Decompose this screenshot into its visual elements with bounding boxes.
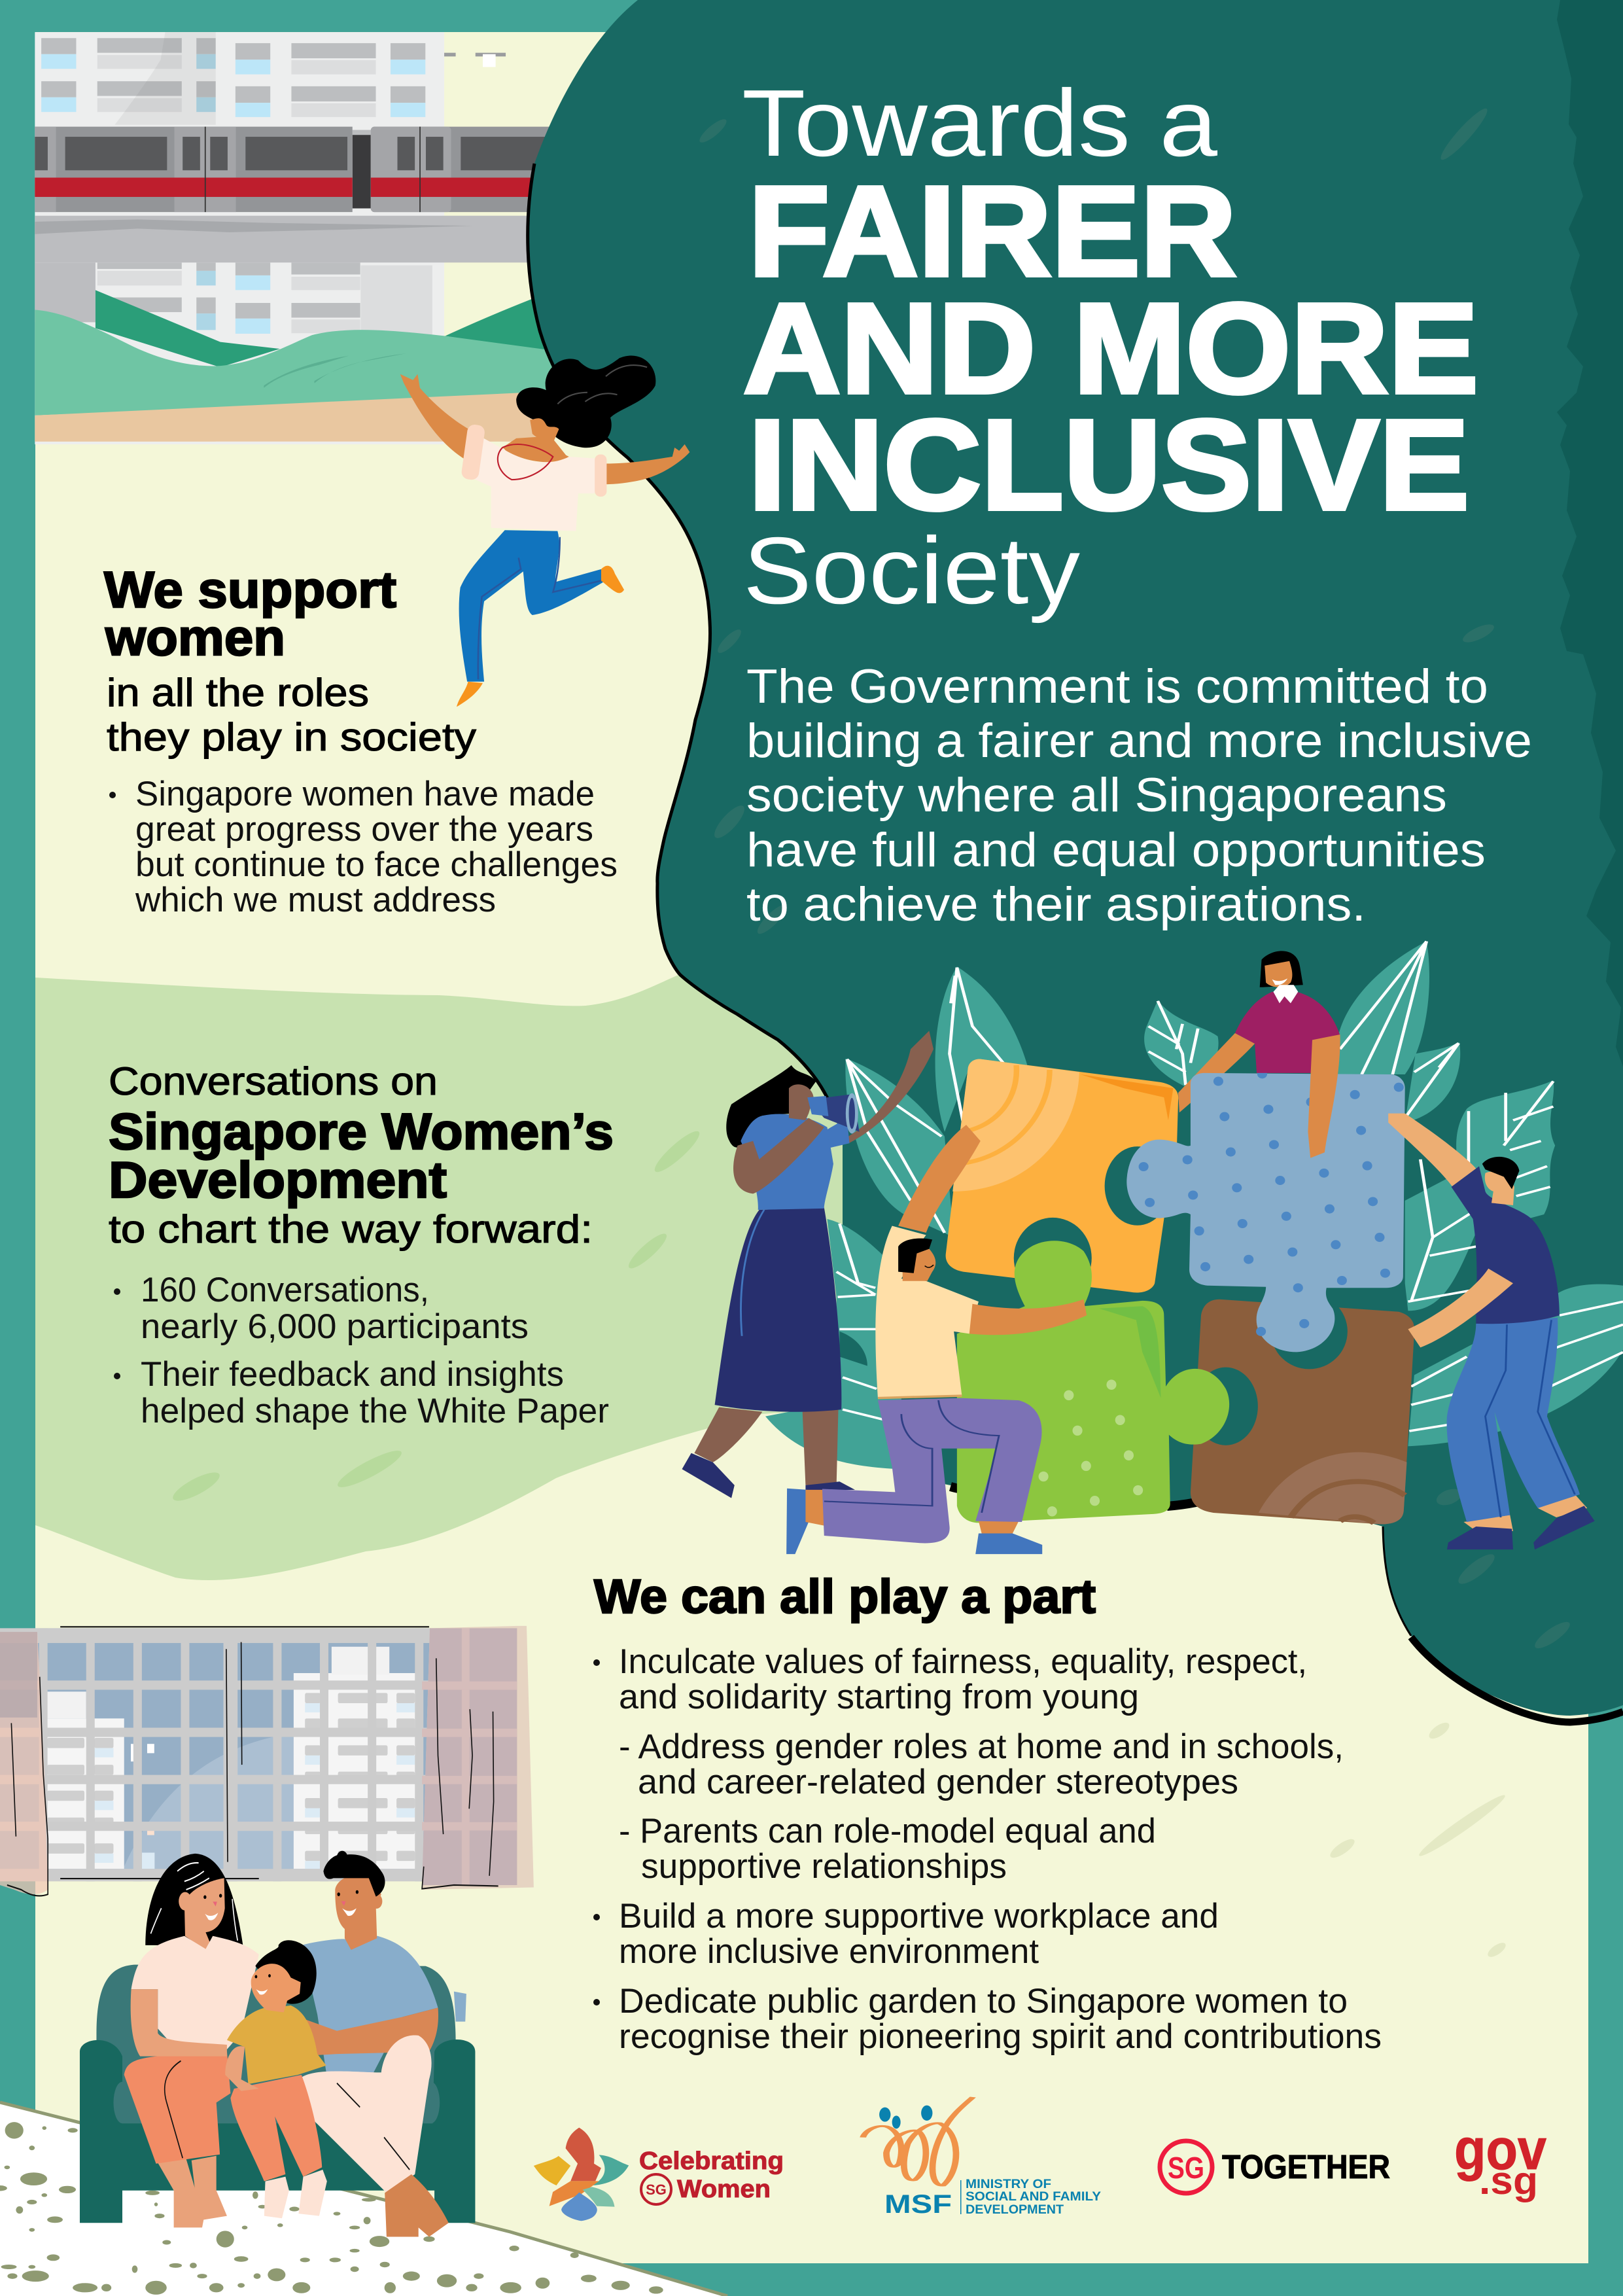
figure: woman above puzzle	[1235, 951, 1340, 1158]
curtains	[0, 1626, 534, 1896]
logo: Celebrating SG Women: Celebrating	[639, 2147, 784, 2175]
puzzle piece: orange	[946, 1059, 1178, 1298]
logos row	[534, 2097, 1546, 2221]
heading: We can all play a part	[594, 1570, 1096, 1623]
title: FAIRER	[748, 160, 1236, 303]
title	[742, 70, 1478, 624]
viaduct	[35, 216, 553, 322]
logo: gov.sg: gov	[1454, 2117, 1546, 2181]
window frame	[0, 1628, 431, 1881]
logo: SG Together: TOGETHER	[1222, 2148, 1390, 2185]
puzzle piece: green	[957, 1241, 1229, 1523]
logo: MSF: MSF	[884, 2190, 952, 2219]
logo: MSF: SOCIAL AND FAMILY	[966, 2190, 1101, 2204]
figure: child	[225, 1940, 327, 2218]
figure: kneeling man	[786, 1125, 1087, 1554]
panel: conversations on Singapore women's development	[109, 1059, 614, 1430]
bullet text: which we must address	[135, 881, 496, 919]
illustration: jumping woman	[400, 355, 689, 707]
logo: MSF: DEVELOPMENT	[966, 2203, 1064, 2217]
leaves	[765, 942, 1623, 1469]
action list: recognise their pioneering spirit and contributions	[619, 2017, 1382, 2056]
buildings in window	[47, 1647, 416, 1869]
logo: Celebrating SG Women: Women	[677, 2176, 771, 2203]
top woman, back arm	[1178, 1033, 1255, 1112]
action list: Build a more supportive workplace and	[619, 1897, 1219, 1935]
main dark teal shape	[528, 0, 1623, 1716]
heading	[109, 1059, 614, 1251]
heading: Development	[109, 1151, 447, 1209]
action list: Inculcate values of fairness, equality, respect,	[619, 1642, 1307, 1681]
intro paragraph: society where all Singaporeans	[746, 769, 1447, 822]
heading: they play in society	[107, 715, 476, 759]
bullet text: helped shape the White Paper	[141, 1392, 609, 1430]
intro paragraph: building a fairer and more inclusive	[746, 715, 1532, 768]
intro paragraph	[746, 660, 1532, 931]
shirt	[470, 436, 606, 531]
heading: Singapore Women’s	[109, 1103, 614, 1160]
heading: women	[105, 609, 285, 666]
heading: We support	[104, 561, 396, 618]
train	[35, 127, 554, 212]
logo: SG Together	[1160, 2141, 1390, 2193]
feet	[457, 682, 483, 707]
floor: terrazzo	[0, 2102, 727, 2296]
title: Towards a	[742, 70, 1217, 176]
sofa	[80, 1965, 475, 2223]
faint brush marks on teal	[697, 105, 1573, 1653]
action list: - Parents can role-model equal and	[619, 1812, 1156, 1850]
face	[530, 418, 559, 443]
figure: father	[296, 1851, 449, 2237]
bullet text: but continue to face challenges	[135, 845, 618, 884]
hair	[516, 355, 655, 448]
heading: Conversations on	[109, 1059, 438, 1103]
logo: Celebrating SG Women: SG	[646, 2181, 667, 2198]
action list	[593, 1642, 1382, 2056]
dark texture on right edge	[1557, 0, 1623, 1067]
logo: Celebrating SG Women	[534, 2128, 784, 2221]
ink outline of main shape	[528, 164, 836, 1119]
bullet text	[109, 775, 618, 919]
action list: - Address gender roles at home and in schools,	[619, 1727, 1344, 1766]
title: AND MORE	[743, 277, 1478, 420]
logo: gov.sg	[1454, 2117, 1546, 2202]
heading: to chart the way forward:	[109, 1207, 593, 1251]
figure: man on right	[1388, 1114, 1595, 1549]
intro paragraph: The Government is committed to	[746, 660, 1488, 713]
intro paragraph: have full and equal opportunities	[746, 824, 1486, 877]
title: INCLUSIVE	[748, 393, 1469, 537]
bullet text: 160 Conversations,	[141, 1271, 429, 1309]
megaphone	[809, 1094, 860, 1132]
figure: woman with megaphone	[682, 1031, 934, 1498]
action list: Dedicate public garden to Singapore women to	[619, 1982, 1348, 2021]
heading	[104, 561, 476, 759]
illustration: window with city view	[0, 1626, 534, 1896]
bullet text	[114, 1271, 609, 1430]
trousers	[459, 530, 603, 682]
puzzle piece: brown	[1191, 1294, 1414, 1524]
bullet text: Singapore women have made	[135, 775, 595, 813]
green band: conversations background	[35, 968, 864, 1580]
logo: MSF	[863, 2097, 1101, 2219]
action list: more inclusive environment	[619, 1932, 1039, 1971]
hills	[35, 290, 557, 444]
heading: in all the roles	[107, 671, 369, 715]
action list: and career-related gender stereotypes	[638, 1763, 1238, 1801]
intro paragraph: to achieve their aspirations.	[746, 878, 1366, 931]
bullet text: great progress over the years	[135, 810, 593, 849]
title: Society	[743, 518, 1081, 624]
illustration: family on sofa	[80, 1851, 475, 2237]
puzzle piece: blue	[1126, 1069, 1405, 1352]
panel: we can all play a part	[593, 1570, 1382, 2056]
logo: gov.sg: .sg	[1479, 2159, 1538, 2202]
logo: SG Together: SG	[1168, 2151, 1204, 2185]
action list: supportive relationships	[641, 1847, 1007, 1886]
faint brush marks on cream	[1327, 1720, 1509, 1960]
brush strokes on green band	[169, 1127, 704, 1506]
panel: we support women	[104, 561, 618, 919]
figure: mother	[124, 1854, 259, 2227]
bullet text: Their feedback and insights	[141, 1355, 564, 1394]
bullet text: nearly 6,000 participants	[141, 1307, 529, 1346]
illustration: people assembling puzzle	[682, 942, 1623, 1554]
action list: and solidarity starting from young	[619, 1678, 1139, 1716]
illustration: train and housing blocks	[35, 32, 557, 444]
logo: MSF: MINISTRY OF	[966, 2178, 1051, 2191]
